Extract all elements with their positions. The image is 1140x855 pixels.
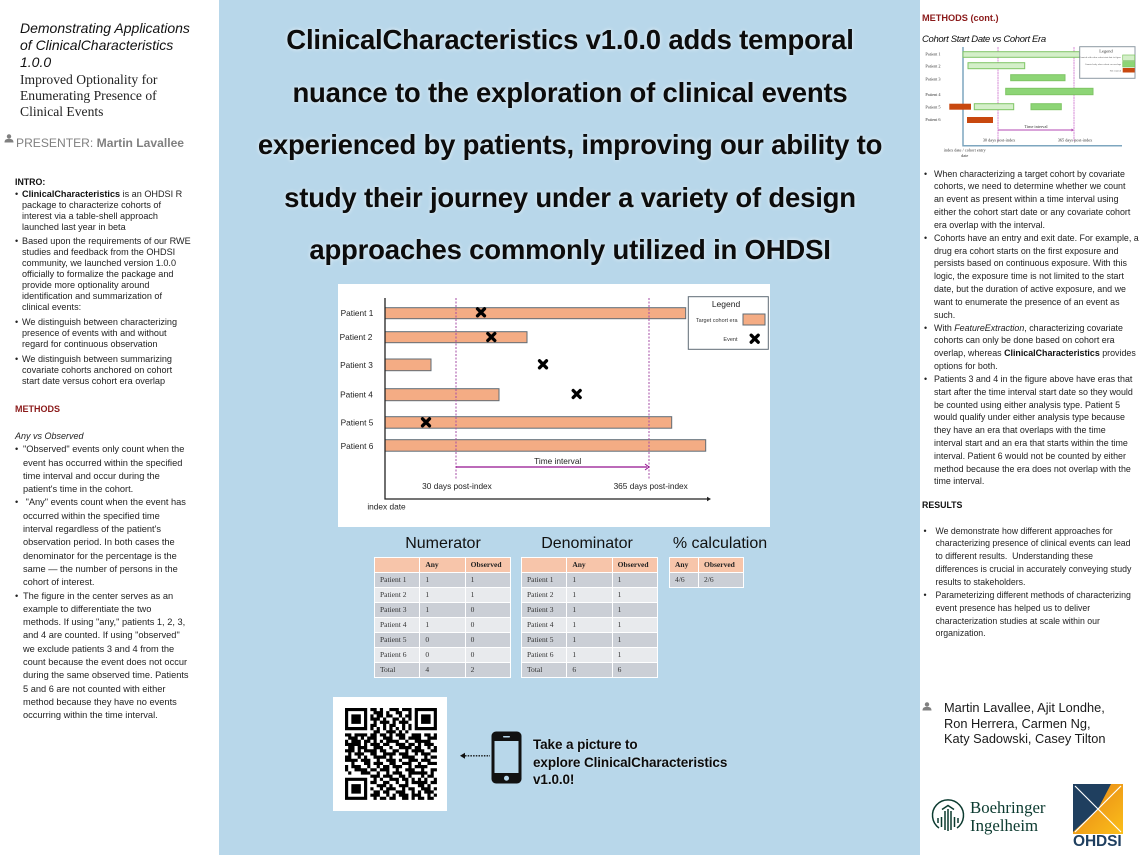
headline: approaches commonly utilized in OHDSI <box>309 234 831 265</box>
any vs observed bullets: cohort of interest. <box>23 577 94 587</box>
chart: cohort start vs era: Patient 2 <box>925 64 941 68</box>
intro bullets: community, we launched version 1.0.0 <box>22 258 176 268</box>
table: numerator: Patient 6 <box>380 650 406 658</box>
intro bullets: We distinguish between summarizing <box>22 354 172 364</box>
chart: any vs observed timeline: Patient 4 <box>340 390 373 400</box>
methods cont bullets: date, but the duration of active exposure, and we <box>934 284 1126 294</box>
results bullets: Parameterizing different methods of characterizing <box>936 590 1131 600</box>
panel: left column: • <box>15 236 18 246</box>
methods cont bullets: cohorts can only be done based on cohort era <box>934 335 1115 345</box>
logo: OHDSI: OHDSI <box>1073 833 1122 850</box>
methods cont bullets: persists based on continuous exposure. With this <box>934 258 1127 268</box>
results bullets <box>924 526 1132 638</box>
chart: any vs observed timeline <box>338 284 770 527</box>
methods cont bullets: interval. Patient 6 would not be counted by either <box>934 451 1126 461</box>
table: denominator: 1 <box>618 634 621 644</box>
results bullets: results to stakeholders. <box>936 577 1025 587</box>
table: denominator: 1 <box>618 620 621 628</box>
table: numerator: 0 <box>425 650 429 658</box>
any vs observed bullets: same — the number of persons in the <box>23 564 178 574</box>
table: percent calculation <box>669 556 744 588</box>
chart: cohort start vs era: 365 days post-index <box>1058 138 1093 142</box>
chart: any vs observed timeline: Legend <box>712 299 740 309</box>
chart: cohort start vs era: Patient 4 <box>925 92 941 97</box>
table: denominator: Patient 5 <box>527 634 553 644</box>
QR call to action: v1.0.0! <box>533 772 574 787</box>
any vs observed bullets: during the same observed time. Patients <box>23 670 189 680</box>
chart: cohort start vs era: index date / cohort entry <box>944 148 987 152</box>
table: denominator: Patient 4 <box>527 620 553 628</box>
chart: cohort start vs era: Counted with when cohort start date in figure <box>1079 56 1121 59</box>
table: denominator: 1 <box>618 650 621 658</box>
intro bullets: regard for continuous observation <box>22 339 157 349</box>
any vs observed bullets: and 4 are counted. If using "observed" <box>23 630 180 640</box>
panel: left column: • <box>15 497 18 507</box>
any vs observed bullets: 5 and 6 are not counted with either <box>23 684 165 694</box>
methods cont bullets: time interval. <box>934 476 984 486</box>
chart: cohort start vs era: Legend <box>1099 48 1113 54</box>
panel: left column: • <box>15 354 18 364</box>
table: denominator: 1 <box>618 590 621 598</box>
chart: any vs observed timeline: 30 days post-index <box>422 481 493 491</box>
intro bullets: package to characterize cohorts of <box>22 200 161 210</box>
intro bullets: We distinguish between characterizing <box>22 317 177 327</box>
table: numerator: Observed <box>471 560 502 568</box>
methods cont bullets: start after the time interval start date so they would <box>934 387 1133 397</box>
heading: percent calculation: % calculation <box>673 535 767 552</box>
any vs observed bullets: count because the event does not occur <box>23 657 187 667</box>
logo: Boehringer Ingelheim: Ingelheim <box>970 816 1038 835</box>
methods cont bullets: an event as present within a time interval using <box>934 194 1119 204</box>
any vs observed subheading: Any vs Observed <box>15 430 84 440</box>
title: Demonstrating Applications <box>20 20 190 36</box>
table: numerator <box>374 556 511 678</box>
table: denominator: 6 <box>618 664 621 674</box>
icon: phone <box>492 732 522 784</box>
chart: any vs observed timeline: Patient 6 <box>341 441 374 451</box>
intro bullets: provide more optionality around <box>22 280 149 290</box>
any vs observed bullets: we exclude patients 3 and 4 from the <box>23 644 174 654</box>
chart: cohort start vs era: Counted only when cohort era overlaps <box>1085 64 1121 66</box>
methods cont bullets: When characterizing a target cohort by covariate <box>934 169 1125 179</box>
any vs observed bullets: event has occurred within the specified <box>23 458 182 468</box>
table: numerator: 2 <box>471 664 474 674</box>
table: denominator <box>521 556 658 678</box>
chart: cohort start vs era: Patient 1 <box>925 52 941 56</box>
any vs observed bullets: occurring within the time interval. <box>23 710 158 720</box>
methods heading: METHODS <box>15 404 60 414</box>
headline: nuance to the exploration of clinical events <box>292 76 848 108</box>
QR code <box>333 697 447 811</box>
panel: left column: • <box>15 444 18 454</box>
methods cont bullets: want to enumerate the presence of an event as <box>934 297 1120 307</box>
chart: any vs observed timeline: Patient 3 <box>340 360 373 370</box>
table: numerator: 1 <box>425 620 429 628</box>
any vs observed bullets: example to differentiate the two <box>23 604 151 614</box>
table: denominator: 1 <box>572 634 576 644</box>
table: numerator: 4 <box>425 664 429 674</box>
authors <box>944 700 1105 746</box>
table: denominator: Observed <box>618 560 648 568</box>
headline: ClinicalCharacteristics v1.0.0 adds temporal <box>286 24 854 55</box>
chart: cohort start vs era: Not counted <box>1110 70 1122 72</box>
table: numerator: 1 <box>471 590 474 598</box>
presenter: PRESENTER: Martin Lavallee <box>16 136 184 150</box>
any vs observed bullets: methods. If using "any," patients 1, 2, 3, <box>23 617 185 627</box>
panel: left column: • <box>15 317 18 327</box>
methods cont bullets: With FeatureExtraction, characterizing covariate <box>934 323 1123 333</box>
intro bullets: start date versus cohort era overlap <box>22 376 165 386</box>
results bullets: event presence has helped us to deliver <box>936 603 1090 613</box>
methods cont bullets: would qualify under either analysis type because <box>934 412 1125 422</box>
table: numerator: Patient 2 <box>380 590 406 598</box>
any vs observed bullets: "Any" events count when the event has <box>26 497 186 507</box>
panel: right column: • <box>924 526 927 536</box>
any vs observed bullets: observation period. In both cases the <box>23 537 175 547</box>
results bullets: characterizing presence of clinical events can lead <box>936 538 1131 548</box>
authors: Martin Lavallee, Ajit Londhe, <box>944 700 1105 715</box>
table: percent calculation: 4/6 <box>675 574 685 584</box>
subtitle: Clinical Events <box>20 104 103 118</box>
methods cont heading: METHODS (cont.) <box>922 13 999 23</box>
heading: numerator: Numerator <box>405 535 481 552</box>
intro bullets: presence of events with and without <box>22 328 167 338</box>
table: numerator: 0 <box>471 634 474 644</box>
panel: left column <box>0 0 219 855</box>
chart: any vs observed timeline: Time interval <box>534 456 581 466</box>
intro bullets: covariate cohorts anchored on cohort <box>22 365 172 375</box>
panel: left column: • <box>15 188 18 198</box>
table: numerator: Patient 4 <box>380 620 406 628</box>
intro bullets <box>15 188 191 386</box>
table: numerator: 0 <box>425 634 429 644</box>
methods cont bullets: Patients 3 and 4 in the figure above have eras that <box>934 374 1132 384</box>
methods cont bullets: overlap, whereas ClinicalCharacteristics provides <box>934 348 1136 358</box>
any vs observed bullets: interval regardless of the patient's <box>23 524 161 534</box>
subtitle: Improved Optionality for <box>20 72 157 86</box>
title: 1.0.0 <box>20 54 51 70</box>
methods cont bullets: Cohorts have an entry and exit date. For example, a <box>934 233 1139 243</box>
headline <box>257 24 884 266</box>
intro bullets: studies and feedback from the OHDSI <box>22 247 175 257</box>
table: denominator: 1 <box>618 574 621 584</box>
title: of ClinicalCharacteristics <box>20 37 173 53</box>
headline: study their journey under a variety of design <box>284 182 856 212</box>
intro bullets: Based upon the requirements of our RWE <box>22 236 191 246</box>
table: numerator: 0 <box>471 650 474 658</box>
methods cont bullets: options for both. <box>934 361 998 371</box>
methods cont bullets: era overlap with the interval. <box>934 220 1045 230</box>
panel: right column: • <box>924 590 927 600</box>
any vs observed bullets: The figure in the center serves as an <box>23 591 173 601</box>
results bullets: organization. <box>936 628 986 638</box>
intro bullets: ClinicalCharacteristics is an OHDSI R <box>22 188 182 198</box>
cohort subheading: Cohort Start Date vs Cohort Era <box>922 34 1046 45</box>
table: numerator: Any <box>425 560 439 568</box>
any vs observed bullets: occurred within the specified time <box>23 511 160 521</box>
table: denominator: Patient 6 <box>527 650 553 658</box>
panel: right column: • <box>924 323 927 333</box>
panel: right column: • <box>924 374 927 384</box>
table: denominator: Any <box>572 560 586 568</box>
subtitle: Enumerating Presence of <box>20 88 157 102</box>
table: denominator: Patient 2 <box>527 590 553 598</box>
panel: right column: • <box>924 233 927 243</box>
chart: any vs observed timeline: Patient 5 <box>341 418 374 428</box>
chart: cohort start vs era: 30 days post-index <box>983 138 1016 142</box>
logo: Boehringer Ingelheim <box>932 798 1046 835</box>
chart: cohort start vs era: Patient 6 <box>925 117 941 122</box>
intro bullets: officially to formalize the package and <box>22 269 173 279</box>
results bullets: We demonstrate how different approaches for <box>936 526 1113 536</box>
results bullets: to different results. Understanding these <box>936 551 1093 561</box>
chart: any vs observed timeline: Patient 2 <box>340 332 373 342</box>
methods cont bullets: either the cohort start date or any covariate cohort <box>934 207 1130 217</box>
table: numerator: 1 <box>425 574 429 584</box>
table: denominator: 1 <box>572 620 576 628</box>
table: denominator: 1 <box>572 650 576 658</box>
icon: authors <box>922 702 932 710</box>
title <box>20 20 190 70</box>
QR call to action <box>533 737 728 787</box>
arrow: phone to QR <box>460 752 490 759</box>
chart: any vs observed timeline: 365 days post-index <box>614 481 689 491</box>
table: percent calculation: 2/6 <box>704 574 714 584</box>
intro heading: INTRO: <box>15 176 45 186</box>
any vs observed bullets: patient's time in the cohort. <box>23 484 133 494</box>
chart: any vs observed timeline: index date <box>367 502 406 512</box>
heading: denominator: Denominator <box>541 535 633 552</box>
icon: presenter <box>4 134 14 142</box>
logo: Boehringer Ingelheim: Boehringer <box>970 798 1046 817</box>
subtitle <box>20 72 158 118</box>
any vs observed bullets: "Observed" events only count when the <box>23 444 184 454</box>
table: numerator: 1 <box>471 574 474 584</box>
any vs observed bullets: denominator for the percentage is the <box>23 551 177 561</box>
table: denominator: Total <box>527 664 542 674</box>
table: denominator: Patient 1 <box>527 574 553 584</box>
methods cont bullets: be counted using either analysis type. Patient 5 <box>934 400 1120 410</box>
methods cont bullets <box>924 169 1139 486</box>
table: denominator: 1 <box>572 590 576 598</box>
table: denominator: Patient 3 <box>527 604 553 614</box>
panel: right column <box>920 0 1140 855</box>
table: denominator: 1 <box>618 604 621 614</box>
chart: cohort start vs era: Time interval <box>1024 124 1048 129</box>
any vs observed bullets: method because they have no events <box>23 697 177 707</box>
chart: any vs observed timeline: Event <box>723 337 738 343</box>
results bullets: characterization studies at scale within our <box>936 616 1100 626</box>
methods cont bullets: logic, the exposure time is not limited to the start <box>934 271 1124 281</box>
chart: any vs observed timeline: Target cohort era <box>696 318 738 324</box>
table: numerator: 0 <box>471 604 474 614</box>
headline: experienced by patients, improving our ability to <box>258 129 882 160</box>
any vs observed bullets <box>15 444 189 720</box>
logo: OHDSI <box>1073 784 1123 850</box>
table: numerator: 1 <box>425 590 429 598</box>
table: denominator: 1 <box>572 574 576 584</box>
methods cont bullets: method because the era does not overlap with the <box>934 464 1131 474</box>
chart: cohort start vs era: date <box>961 153 968 158</box>
authors: Katy Sadowski, Casey Tilton <box>944 731 1105 746</box>
any vs observed bullets: time interval and occur during the <box>23 471 160 481</box>
chart: cohort start vs era: Patient 5 <box>925 104 941 110</box>
panel: right column: • <box>924 169 927 179</box>
methods cont bullets: such. <box>934 310 955 320</box>
table: percent calculation: Observed <box>704 560 735 568</box>
chart: cohort start vs era: Patient 3 <box>925 76 941 82</box>
table: percent calculation: Any <box>675 560 688 568</box>
intro bullets: launched last year in beta <box>22 222 126 232</box>
table: numerator: Patient 5 <box>380 634 406 644</box>
table: numerator: 0 <box>471 620 474 628</box>
intro bullets: clinical events: <box>22 302 81 312</box>
QR call to action: Take a picture to <box>533 737 638 752</box>
table: numerator: Patient 1 <box>380 574 406 584</box>
results heading: RESULTS <box>922 500 962 510</box>
methods cont bullets: interval start and an era that starts within the time <box>934 438 1128 448</box>
chart: cohort start vs era <box>925 46 1136 158</box>
results bullets: differences is crucial in accurately conveying study <box>936 564 1131 574</box>
intro bullets: interest via a table-shell approach <box>22 210 158 220</box>
methods cont bullets: cohorts, we need to determine whether we count <box>934 181 1125 191</box>
methods cont bullets: they have an era that overlaps with the time <box>934 425 1106 435</box>
chart: any vs observed timeline: Patient 1 <box>341 308 374 318</box>
table: numerator: Total <box>380 664 395 674</box>
intro bullets: identification and summarization of <box>22 291 162 301</box>
panel: left column: • <box>15 591 18 601</box>
table: denominator: 6 <box>572 664 576 674</box>
table: numerator: 1 <box>425 604 429 614</box>
table: numerator: Patient 3 <box>380 604 406 614</box>
authors: Ron Herrera, Carmen Ng, <box>944 716 1091 731</box>
table: denominator: 1 <box>572 604 576 614</box>
QR call to action: explore ClinicalCharacteristics <box>533 754 727 770</box>
methods cont bullets: drug era cohort starts on the first exposure and <box>934 246 1119 256</box>
